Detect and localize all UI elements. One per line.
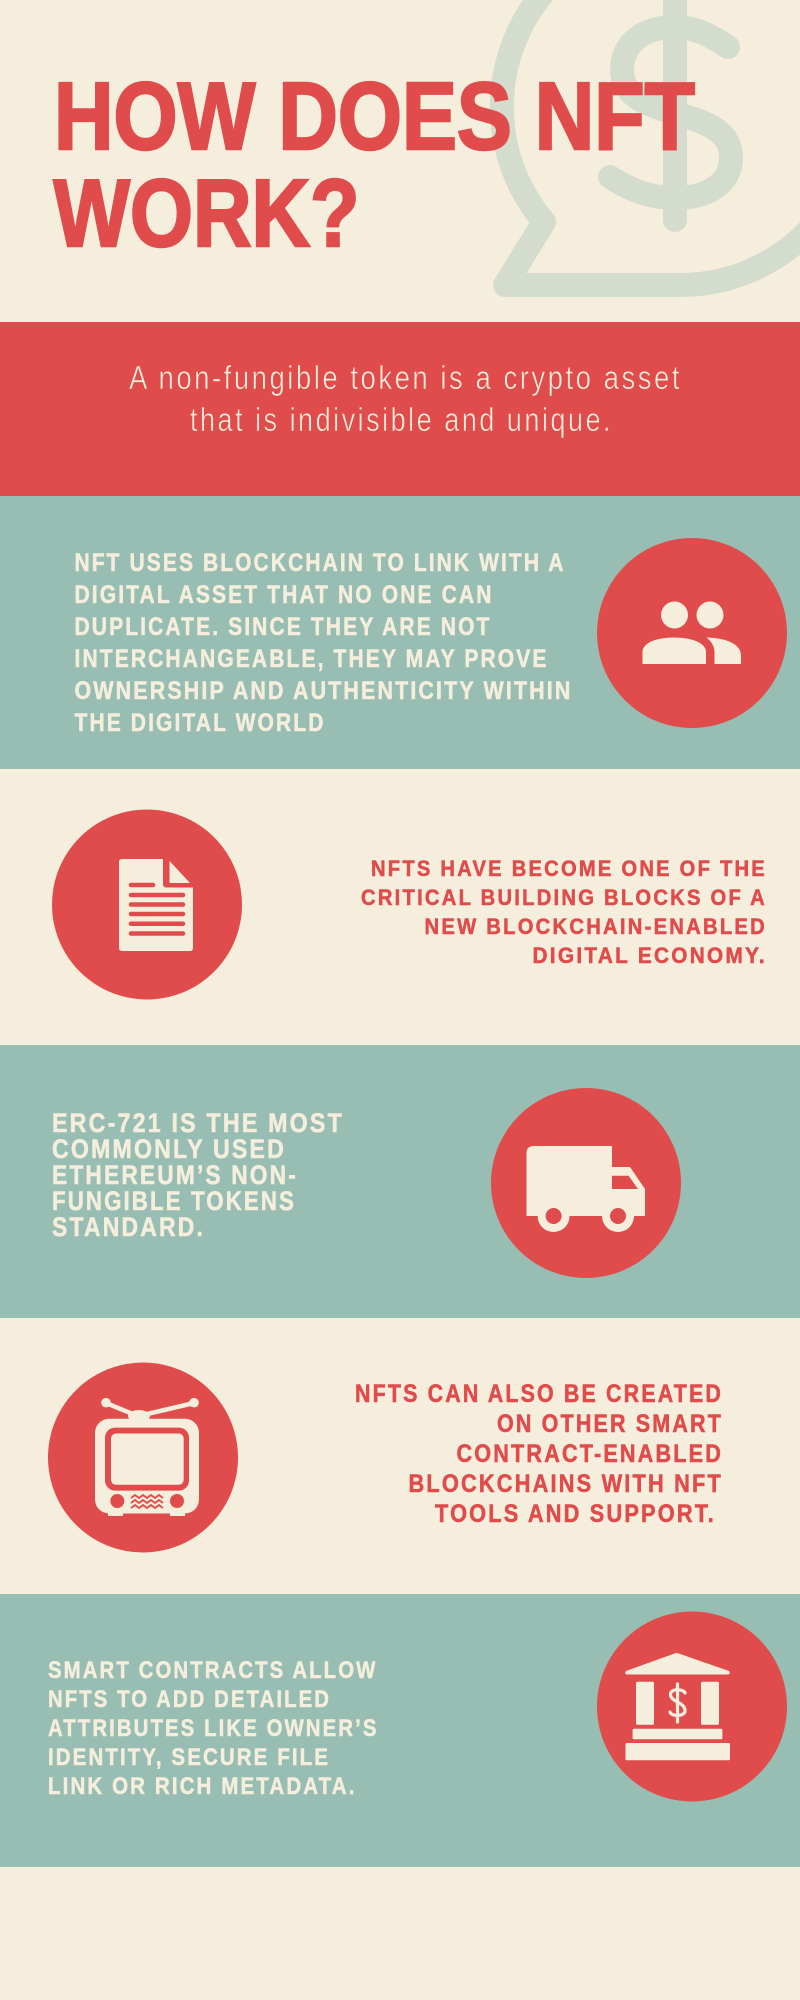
panel: intro band — [0, 322, 800, 496]
panel: building blocks — [52, 810, 767, 1000]
icon: bank — [597, 1612, 787, 1802]
text: blockchain link: DUPLICATE. SINCE THEY ARE NOT — [74, 613, 492, 641]
text: smart contracts: LINK OR RICH METADATA. — [48, 1773, 356, 1800]
icon: document — [52, 810, 242, 1000]
text: ERC-721: ERC-721 IS THE MOST — [52, 1108, 344, 1138]
text: smart contracts: SMART CONTRACTS ALLOW — [48, 1657, 378, 1684]
text: blockchain link: INTERCHANGEABLE, THEY MAY PROVE — [74, 645, 548, 673]
intro text — [129, 359, 682, 438]
text: ERC-721: ETHEREUM’S NON- — [52, 1160, 298, 1190]
panel: ERC-721 — [0, 1045, 800, 1318]
text: smart contracts: ATTRIBUTES LIKE OWNER’S — [48, 1715, 378, 1742]
text: other smart contract chains: BLOCKCHAINS WITH NFT — [408, 1470, 723, 1498]
panel: blockchain link — [0, 496, 800, 769]
panel: smart contracts — [0, 1594, 800, 1867]
text: building blocks: CRITICAL BUILDING BLOCKS OF A — [361, 885, 767, 910]
text: building blocks: NEW BLOCKCHAIN-ENABLED — [424, 914, 767, 939]
text: building blocks — [361, 856, 767, 968]
text: smart contracts: NFTS TO ADD DETAILED — [48, 1686, 331, 1713]
intro text: that is indivisible and unique. — [190, 401, 613, 438]
text: other smart contract chains: CONTRACT-ENABLED — [456, 1440, 723, 1468]
text: other smart contract chains: ON OTHER SMART — [497, 1410, 723, 1438]
text: ERC-721: COMMONLY USED — [52, 1134, 286, 1164]
panel: other smart contract chains — [48, 1362, 723, 1552]
text: smart contracts — [48, 1657, 378, 1800]
icon: television — [48, 1362, 238, 1552]
icon: truck — [491, 1088, 681, 1278]
text: other smart contract chains: TOOLS AND SUPPORT. — [435, 1500, 716, 1528]
text: blockchain link: OWNERSHIP AND AUTHENTICITY WITHIN — [74, 677, 572, 705]
intro text: A non-fungible token is a crypto asset — [129, 359, 682, 396]
text: blockchain link: DIGITAL ASSET THAT NO ONE CAN — [74, 581, 494, 609]
text: building blocks: NFTS HAVE BECOME ONE OF THE — [371, 856, 767, 881]
text: blockchain link — [74, 549, 572, 737]
text: blockchain link: THE DIGITAL WORLD — [74, 709, 326, 737]
text: smart contracts: IDENTITY, SECURE FILE — [48, 1744, 330, 1771]
text: other smart contract chains — [355, 1380, 723, 1528]
title — [54, 63, 695, 267]
text: building blocks: DIGITAL ECONOMY. — [532, 943, 767, 968]
text: other smart contract chains: NFTS CAN ALSO BE CREATED — [355, 1380, 723, 1408]
icon: people — [597, 538, 787, 728]
icon: speech bubble with dollar sign watermark — [502, 0, 800, 285]
title: WORK? — [54, 160, 360, 267]
title: HOW DOES NFT — [54, 63, 695, 170]
text: ERC-721 — [52, 1108, 344, 1242]
text: ERC-721: FUNGIBLE TOKENS — [52, 1186, 296, 1216]
text: ERC-721: STANDARD. — [52, 1212, 205, 1242]
text: blockchain link: NFT USES BLOCKCHAIN TO LINK WITH A — [74, 549, 566, 577]
